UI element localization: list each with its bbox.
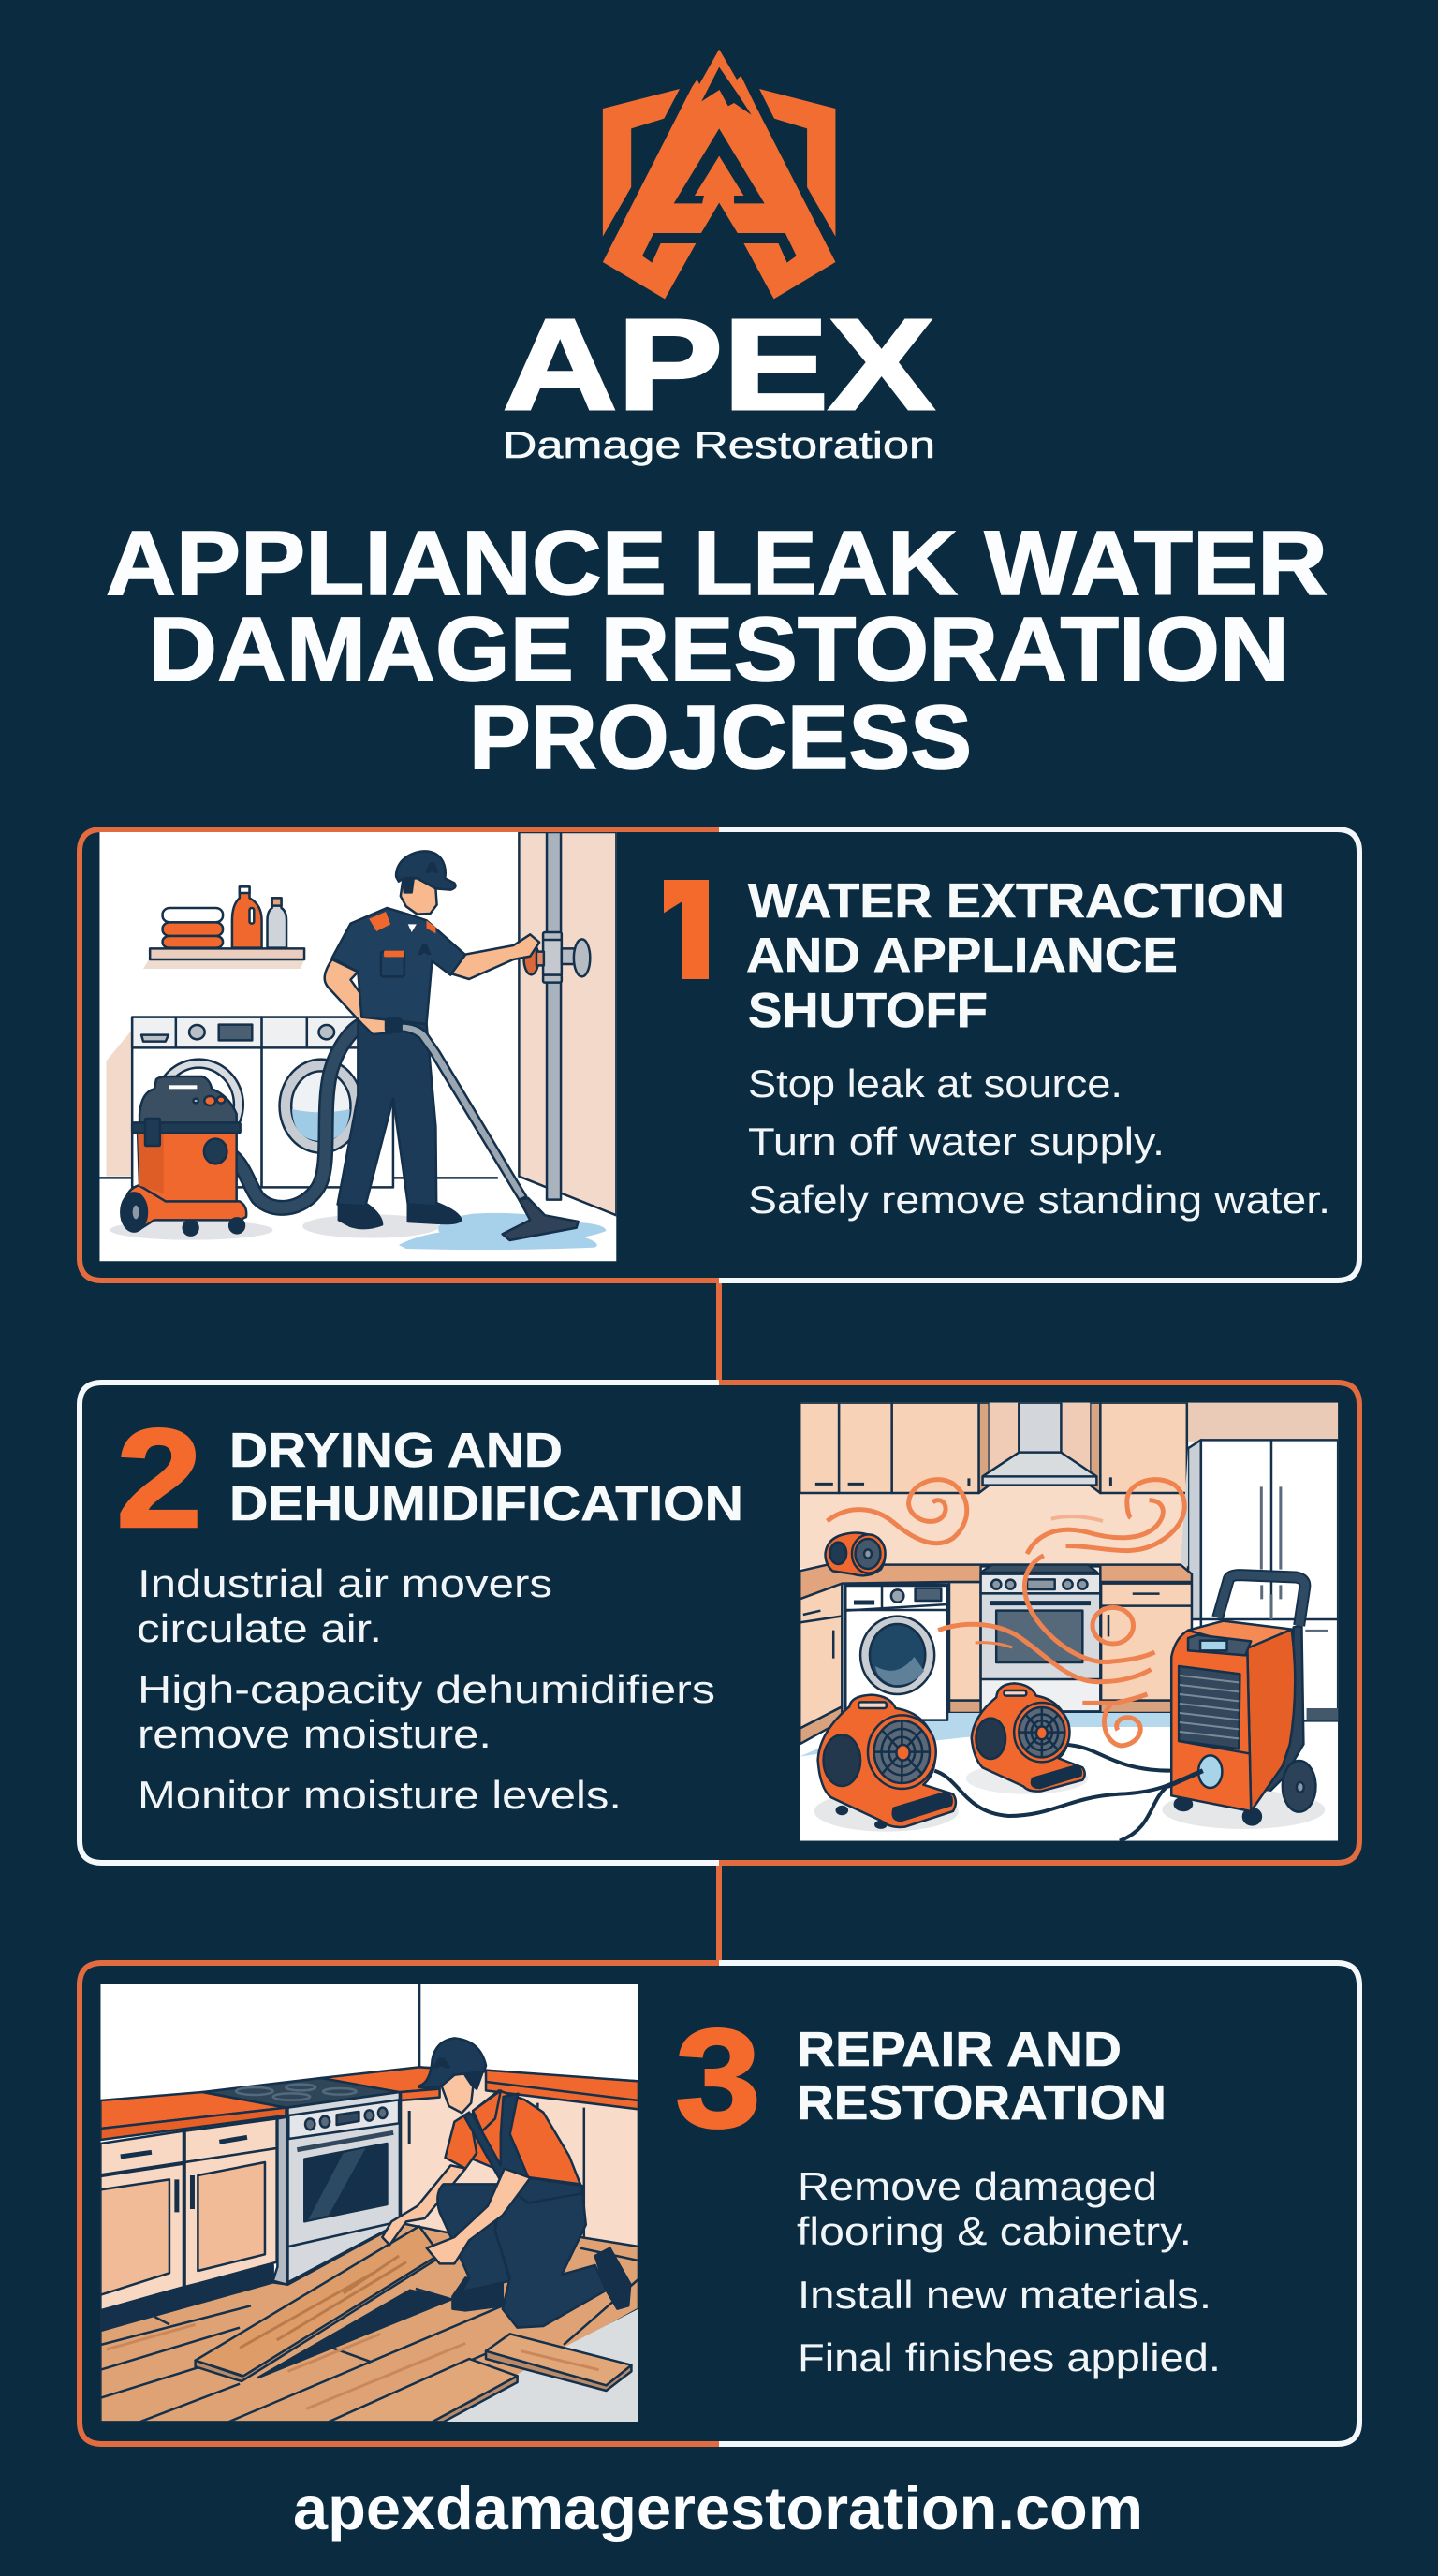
step 3 body text: Install new materials. [798,2273,1211,2317]
step 1 heading: SHUTOFF [748,984,988,1038]
step 3 body text: Remove damaged [798,2164,1157,2208]
step 1 heading: WATER EXTRACTION [748,874,1284,929]
card frame 3 [80,1963,1359,2444]
step 3 body text: Final finishes applied. [798,2335,1221,2379]
step 1 body text: Safely remove standing water. [748,1178,1330,1222]
step number 1 [664,880,709,979]
step 2 body text: circulate air. [137,1606,382,1650]
illustration: worker replacing floor planks in kitchen: A [434,2056,449,2071]
brand tagline: Damage Restoration [503,425,935,466]
brand name: APEX: APEX [503,293,934,437]
step 3 heading: RESTORATION [797,2076,1167,2130]
step 3 heading: REPAIR AND [797,2023,1122,2077]
panel: step 1 water extraction [80,829,1359,1281]
step 2 heading [229,1424,743,1531]
connector: step 1 to step 2 [716,1281,722,1383]
step number 1: 1 [643,848,735,1032]
step 3 heading [797,2023,1167,2130]
illustration: technician shutting valve and vacuuming water: A [419,944,431,958]
step 1 body text: Stop leak at source. [748,1061,1123,1105]
step 2 body text: remove moisture. [138,1712,492,1756]
panel: step 3 repair [80,1963,1359,2444]
step number 3: 3 [675,1999,761,2157]
step 2 body text [137,1561,715,1817]
step number 2: 2 [116,1399,202,1557]
panel: step 2 drying [80,1383,1359,1863]
title: APPLIANCE LEAK WATER [106,512,1328,614]
illustration: worker replacing floor planks in kitchen [100,1984,638,2422]
illustration: technician shutting valve and vacuuming water [99,832,616,1261]
step 2 body text: Monitor moisture levels. [138,1773,622,1817]
step 2 heading: DEHUMIDIFICATION [229,1477,743,1531]
title [106,512,1328,788]
illustration: technician shutting valve and vacuuming water: A [427,860,437,874]
step 1 body text: Turn off water supply. [748,1120,1165,1164]
step 2 body text: Industrial air movers [138,1561,552,1605]
step 3 body text: flooring & cabinetry. [797,2209,1192,2253]
step 1 heading: AND APPLIANCE [746,929,1178,983]
step 2 heading: DRYING AND [229,1424,563,1478]
step 1 heading [746,874,1284,1038]
step 2 body text: High-capacity dehumidifiers [138,1667,715,1711]
step 1 body text [748,1061,1330,1222]
card frame 2 [80,1383,1359,1863]
step 3 body text [797,2164,1221,2379]
website footer: apexdamagerestoration.com [293,2474,1143,2542]
title: DAMAGE RESTORATION [148,598,1289,700]
title: PROJCESS [469,686,972,788]
connector: step 2 to step 3 [716,1863,722,1963]
illustration: air movers and dehumidifier in kitchen [800,1403,1338,1841]
logo: Apex mountain emblem [603,50,835,299]
card frame 1 [80,829,1359,1281]
